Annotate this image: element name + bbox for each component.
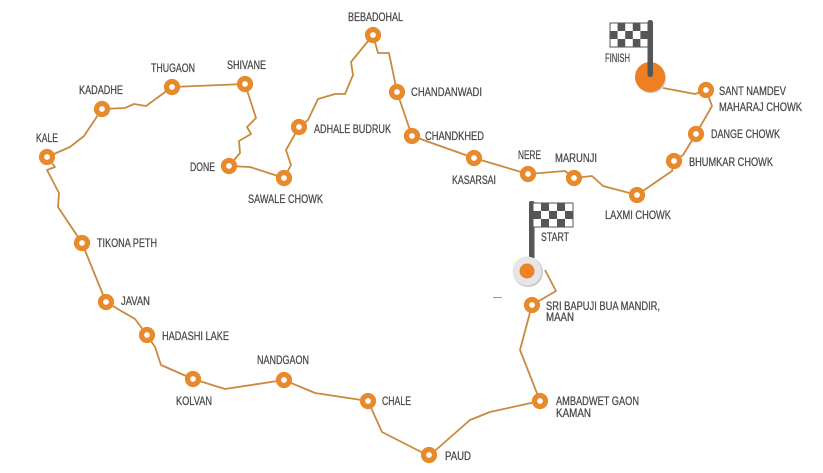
start pin bbox=[512, 256, 543, 287]
stop: Kasarsai: KASARSAI bbox=[452, 173, 496, 187]
route line bbox=[47, 35, 712, 456]
stop: Javan bbox=[100, 294, 150, 308]
stop: Sawale Chowk: SAWALE CHOWK bbox=[248, 192, 323, 206]
stop: Kale bbox=[36, 131, 58, 162]
stop: Sant Namdev Maharaj Chowk: SANT NAMDEV bbox=[719, 84, 786, 98]
stop: Chale: CHALE bbox=[382, 394, 411, 408]
stop: Shivane bbox=[227, 58, 266, 90]
stop: Nere bbox=[518, 148, 541, 180]
start marker bbox=[512, 201, 573, 287]
stop: Marunji bbox=[555, 151, 597, 184]
stop: Sant Namdev Maharaj Chowk bbox=[700, 84, 802, 114]
stop: Kadadhe bbox=[79, 83, 123, 114]
stop: Sawale Chowk bbox=[248, 172, 323, 206]
stop: Chandkhed bbox=[406, 129, 484, 143]
stop: Javan: JAVAN bbox=[121, 294, 150, 308]
stop: Kale: KALE bbox=[36, 131, 58, 145]
stop: Tikona Peth bbox=[76, 236, 157, 250]
stop: Thugaon bbox=[151, 61, 195, 92]
stop: Laxmi Chowk bbox=[605, 190, 671, 222]
stop: Ambadwet Gaon Kaman: AMBADWET GAON bbox=[556, 394, 639, 408]
finish pin bbox=[635, 62, 666, 93]
stop: Chale bbox=[362, 394, 411, 408]
stop: Nandgaon bbox=[257, 353, 309, 386]
stop: Bhumkar Chowk bbox=[668, 155, 773, 169]
stop: Shivane: SHIVANE bbox=[227, 58, 266, 72]
stop: Sri Bapuji Bua Mandir, Maan: MAAN bbox=[546, 310, 574, 324]
stop: Dange Chowk bbox=[690, 127, 780, 141]
stop: Nere: NERE bbox=[518, 148, 541, 162]
stop: Kadadhe: KADADHE bbox=[79, 83, 123, 97]
stop: Chandanwadi bbox=[392, 85, 482, 99]
stop: Chandkhed: CHANDKHED bbox=[425, 129, 484, 143]
stop: Marunji: MARUNJI bbox=[555, 151, 597, 165]
stop: Kasarsai bbox=[452, 152, 496, 187]
stop: Adhale Budruk bbox=[294, 122, 391, 136]
stop: Done: DONE bbox=[190, 160, 215, 174]
stop: Kolvan: KOLVAN bbox=[176, 394, 212, 408]
stop: Ambadwet Gaon Kaman bbox=[534, 394, 639, 420]
stop: Bebadohal: BEBADOHAL bbox=[348, 10, 403, 24]
stop: Paud: PAUD bbox=[445, 449, 471, 463]
finish flag bbox=[610, 20, 653, 77]
stop: Sri Bapuji Bua Mandir, Maan: SRI BAPUJI BUA MANDIR, bbox=[546, 299, 660, 313]
finish label: FINISH bbox=[605, 51, 630, 65]
start flag bbox=[529, 201, 573, 259]
stop: Hadashi Lake: HADASHI LAKE bbox=[162, 329, 229, 343]
stop: Dange Chowk: DANGE CHOWK bbox=[711, 127, 780, 141]
stop: Chandanwadi: CHANDANWADI bbox=[411, 85, 482, 99]
stop: Kolvan bbox=[176, 374, 212, 408]
stop: Bebadohal bbox=[348, 10, 403, 40]
stop: Ambadwet Gaon Kaman: KAMAN bbox=[556, 406, 591, 420]
start label: START bbox=[541, 230, 569, 244]
stop: Hadashi Lake bbox=[142, 329, 229, 343]
stop: Sant Namdev Maharaj Chowk: MAHARAJ CHOWK bbox=[719, 100, 802, 114]
stop: Paud bbox=[424, 449, 471, 463]
stop: Bhumkar Chowk: BHUMKAR CHOWK bbox=[689, 155, 773, 169]
stray mark bbox=[493, 297, 502, 298]
stop: Thugaon: THUGAON bbox=[151, 61, 195, 75]
finish marker bbox=[605, 20, 666, 93]
stop: Tikona Peth: TIKONA PETH bbox=[97, 236, 157, 250]
stop: Sri Bapuji Bua Mandir, Maan bbox=[526, 299, 660, 324]
stop: Nandgaon: NANDGAON bbox=[257, 353, 309, 367]
stop: Adhale Budruk: ADHALE BUDRUK bbox=[314, 122, 391, 136]
stop: Laxmi Chowk: LAXMI CHOWK bbox=[605, 208, 671, 222]
